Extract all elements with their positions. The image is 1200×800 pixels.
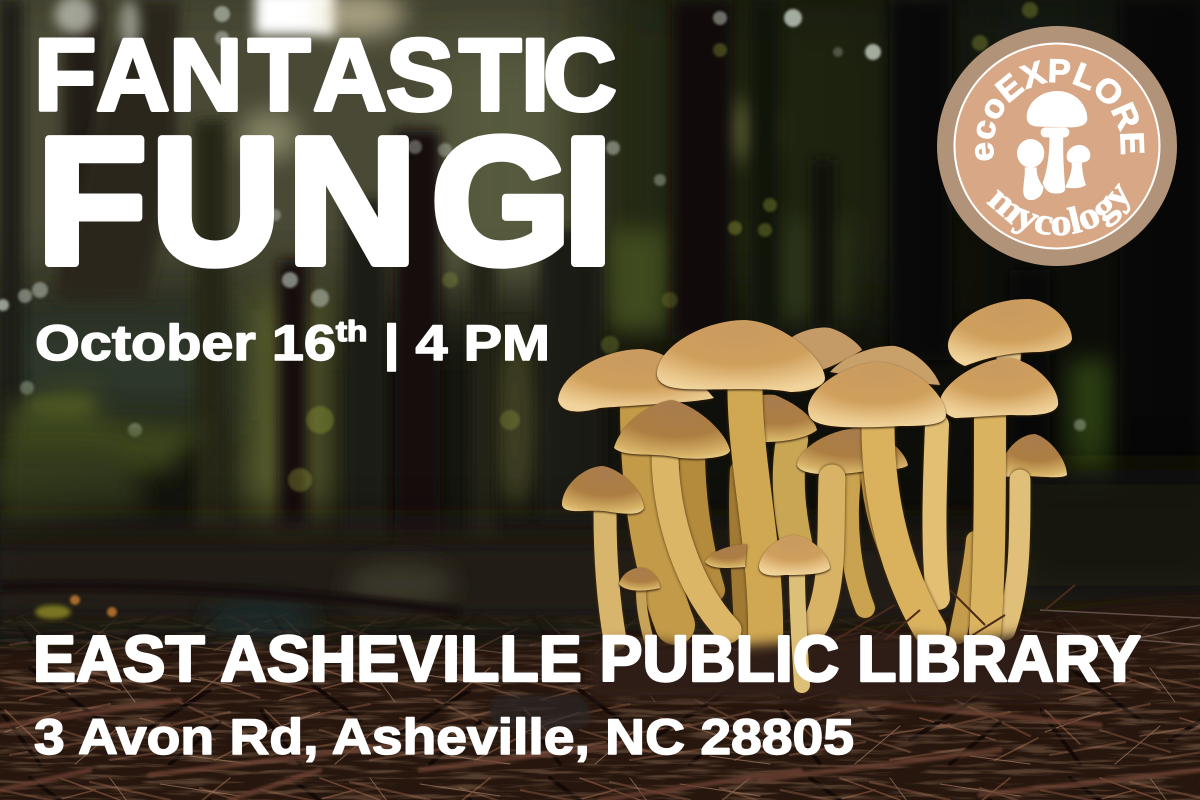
title: Fungi: FUNGI	[37, 101, 613, 302]
tree trunks	[0, 0, 1200, 550]
icon: mushrooms	[1017, 91, 1090, 200]
badge text: mycology: mycology	[986, 182, 1130, 236]
date and time: October 16	[35, 315, 296, 371]
small front stem	[797, 572, 802, 685]
forest floor: pine needles	[0, 599, 1200, 800]
title: Fantastic: FANTASTIC	[34, 18, 617, 132]
ground debris at mushroom bases	[590, 585, 1075, 700]
bush foliage	[0, 385, 205, 530]
back caps	[558, 328, 1067, 477]
back stems	[640, 405, 975, 635]
blurred mid-ground	[0, 470, 1200, 640]
right side shade	[0, 0, 1200, 560]
front stems	[745, 388, 990, 660]
venue name: EAST ASHEVILLE PUBLIC LIBRARY	[33, 622, 1141, 695]
venue address: 3 Avon Rd, Asheville, NC 28805	[34, 709, 854, 765]
forest canopy glow	[0, 0, 1130, 520]
badge text: ecoEXPLORE: ecoEXPLORE	[974, 58, 1144, 160]
sun flare	[55, 0, 405, 160]
date and time: | 4 PM	[367, 315, 550, 372]
bokeh lights	[0, 6, 1086, 437]
badge: ecoEXPLORE mycology	[937, 26, 1177, 266]
mushroom cluster	[558, 299, 1075, 700]
date and time: th	[336, 316, 367, 348]
mid stems	[605, 335, 1020, 645]
front caps	[562, 299, 1072, 591]
